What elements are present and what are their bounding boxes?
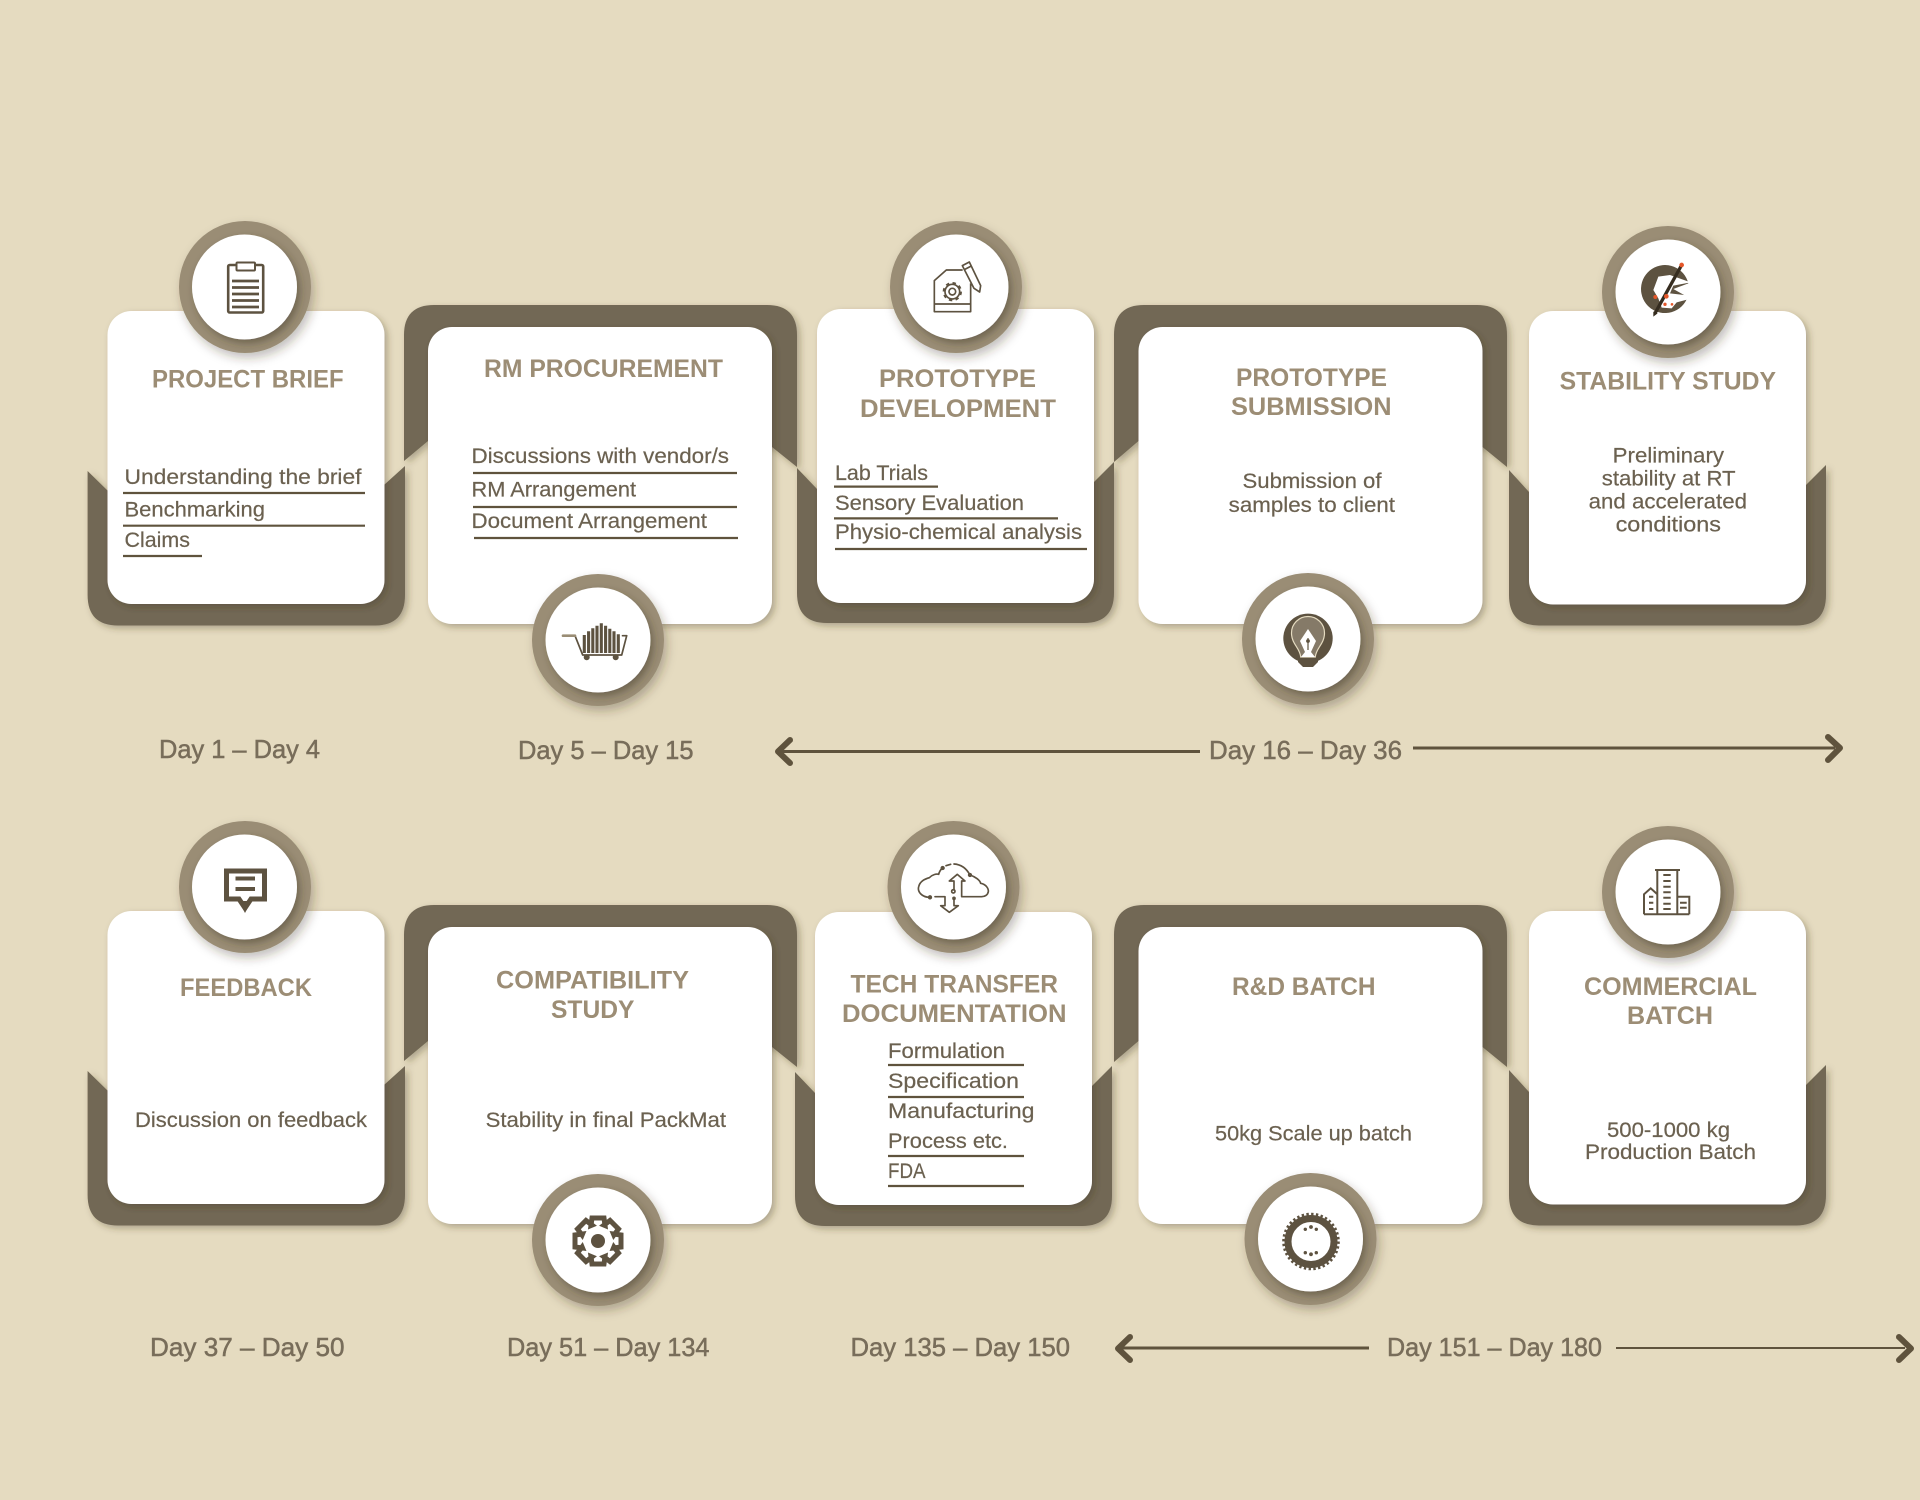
heading: commercial batch: [1584, 973, 1757, 1030]
text block: compatibility study: Stability in final PackMat: [486, 1109, 726, 1132]
heading: prototype development: [860, 365, 1056, 423]
text block: commercial batch: Production Batch: [1585, 1141, 1756, 1164]
icon: light bulb with pen nib: [1242, 573, 1374, 705]
panel: prototype submission: [1114, 305, 1507, 705]
heading: prototype submission: SUBMISSION: [1231, 393, 1392, 421]
text block: tech transfer items: FDA: [888, 1160, 926, 1183]
icon: document with gear and pencil: [890, 221, 1022, 353]
text block: rm procurement items: [472, 445, 738, 538]
day label: day 51 to 134: Day 51 – Day 134: [507, 1332, 710, 1362]
text block: prototype development items: Sensory Evaluation: [835, 492, 1024, 515]
panel: prototype development: [797, 221, 1114, 623]
text block: prototype submission: Submission of: [1242, 470, 1382, 493]
backing shape: commercial batch: [1509, 1065, 1826, 1226]
text block: rm procurement items: RM Arrangement: [472, 479, 636, 502]
panel: stability study: [1509, 226, 1826, 626]
card: prototype development: [817, 309, 1094, 603]
text block: feedback: Discussion on feedback: [135, 1109, 368, 1132]
heading: tech transfer: TECH TRANSFER: [850, 970, 1058, 998]
heading: compatibility study: COMPATIBILITY: [496, 967, 689, 995]
text block: stability study: stability at RT: [1602, 468, 1736, 490]
panel: feedback: [88, 821, 405, 1226]
heading: tech transfer: [842, 970, 1066, 1028]
day label: day 1 to 4: Day 1 – Day 4: [159, 734, 320, 764]
heading: commercial batch: BATCH: [1627, 1002, 1713, 1030]
heading: r and d batch: R&D BATCH: [1232, 973, 1376, 1001]
card: commercial batch: [1529, 911, 1806, 1204]
text block: tech transfer items: [888, 1040, 1034, 1186]
text block: rm procurement items: Discussions with vendor/s: [472, 445, 729, 468]
panel: tech transfer documentation: [795, 821, 1112, 1226]
card: rm procurement: [428, 327, 772, 624]
text block: commercial batch: [1585, 1119, 1756, 1164]
panel: rm procurement: [404, 305, 797, 706]
panel: commercial batch: [1509, 826, 1826, 1226]
heading: prototype submission: [1231, 364, 1392, 421]
timeline span: day 151 to 180: [1118, 1332, 1911, 1362]
heading: feedback: FEEDBACK: [180, 974, 312, 1002]
text block: prototype development items: Physio-chemical analysis: [835, 521, 1082, 544]
timeline span: day 16 to 36: Day 16 – Day 36: [1209, 735, 1402, 765]
text block: stability study: conditions: [1616, 513, 1721, 536]
card: compatibility study: [428, 927, 772, 1224]
heading: project brief: PROJECT BRIEF: [152, 366, 344, 394]
day label: day 135 to 150: Day 135 – Day 150: [850, 1332, 1070, 1362]
icon: cloud with arrows: [888, 821, 1020, 953]
panel: compatibility study: [404, 905, 797, 1306]
backing shape: r and d batch: [1114, 905, 1507, 1067]
backing shape: prototype submission: [1114, 305, 1507, 467]
icon: speech bubble: [179, 821, 311, 953]
text block: rm procurement items: Document Arrangement: [472, 510, 707, 533]
icon: gear: [532, 1174, 664, 1306]
heading: stability study: STABILITY STUDY: [1560, 367, 1776, 395]
text block: stability study: Preliminary: [1613, 444, 1725, 468]
card: feedback: [108, 911, 384, 1204]
text block: project brief items: Claims: [124, 529, 190, 552]
heading: prototype development: PROTOTYPE: [879, 365, 1036, 393]
text block: tech transfer items: Formulation: [888, 1040, 1005, 1063]
backing shape: stability study: [1509, 465, 1826, 626]
backing shape: tech transfer: [795, 1066, 1112, 1226]
heading: compatibility study: STUDY: [551, 996, 635, 1024]
heading: prototype development: DEVELOPMENT: [860, 395, 1056, 423]
text block: prototype development items: [834, 462, 1087, 549]
icon: serrated ring with stars: [1244, 1173, 1376, 1305]
timeline span: day 151 to 180: Day 151 – Day 180: [1387, 1332, 1602, 1362]
day label: day 37 to 50: Day 37 – Day 50: [150, 1332, 344, 1362]
backing shape: project brief: [88, 466, 405, 626]
text block: project brief items: Benchmarking: [124, 498, 265, 522]
heading: compatibility study: [496, 967, 689, 1024]
panel: r and d batch: [1114, 905, 1507, 1305]
icon: hand holding pen: [1602, 226, 1734, 358]
text block: prototype submission: samples to client: [1229, 494, 1395, 517]
text block: prototype submission: [1229, 470, 1395, 517]
text block: stability study: and accelerated: [1589, 490, 1747, 514]
text block: stability study: [1589, 444, 1747, 536]
text block: tech transfer items: Specification: [888, 1070, 1019, 1093]
icon: clipboard: [179, 221, 311, 353]
backing shape: compatibility study: [404, 905, 797, 1067]
card: stability study: [1529, 311, 1806, 604]
heading: tech transfer: DOCUMENTATION: [842, 1000, 1066, 1028]
text block: project brief items: Understanding the brief: [124, 466, 362, 489]
card: prototype submission: [1138, 327, 1482, 624]
text block: r and d batch: 50kg Scale up batch: [1215, 1123, 1412, 1146]
timeline span: day 16 to 36: [778, 735, 1840, 765]
card: project brief: [108, 311, 384, 604]
text block: project brief items: [123, 466, 365, 556]
heading: commercial batch: COMMERCIAL: [1584, 973, 1757, 1001]
heading: prototype submission: PROTOTYPE: [1236, 364, 1387, 392]
icon: shopping cart: [532, 574, 664, 706]
backing shape: prototype development: [797, 462, 1114, 623]
day label: day 5 to 15: Day 5 – Day 15: [518, 735, 694, 765]
text block: tech transfer items: Manufacturing: [888, 1100, 1034, 1123]
text block: commercial batch: 500-1000 kg: [1607, 1119, 1730, 1142]
backing shape: feedback: [88, 1066, 405, 1226]
text block: tech transfer items: Process etc.: [888, 1130, 1008, 1153]
card: tech transfer: [815, 912, 1092, 1205]
icon: buildings: [1602, 826, 1734, 958]
panel: project brief: [88, 221, 405, 626]
text block: prototype development items: Lab Trials: [835, 462, 928, 485]
card: r and d batch: [1138, 927, 1482, 1224]
heading: rm procurement: RM PROCUREMENT: [484, 355, 723, 383]
backing shape: rm procurement: [404, 305, 797, 467]
